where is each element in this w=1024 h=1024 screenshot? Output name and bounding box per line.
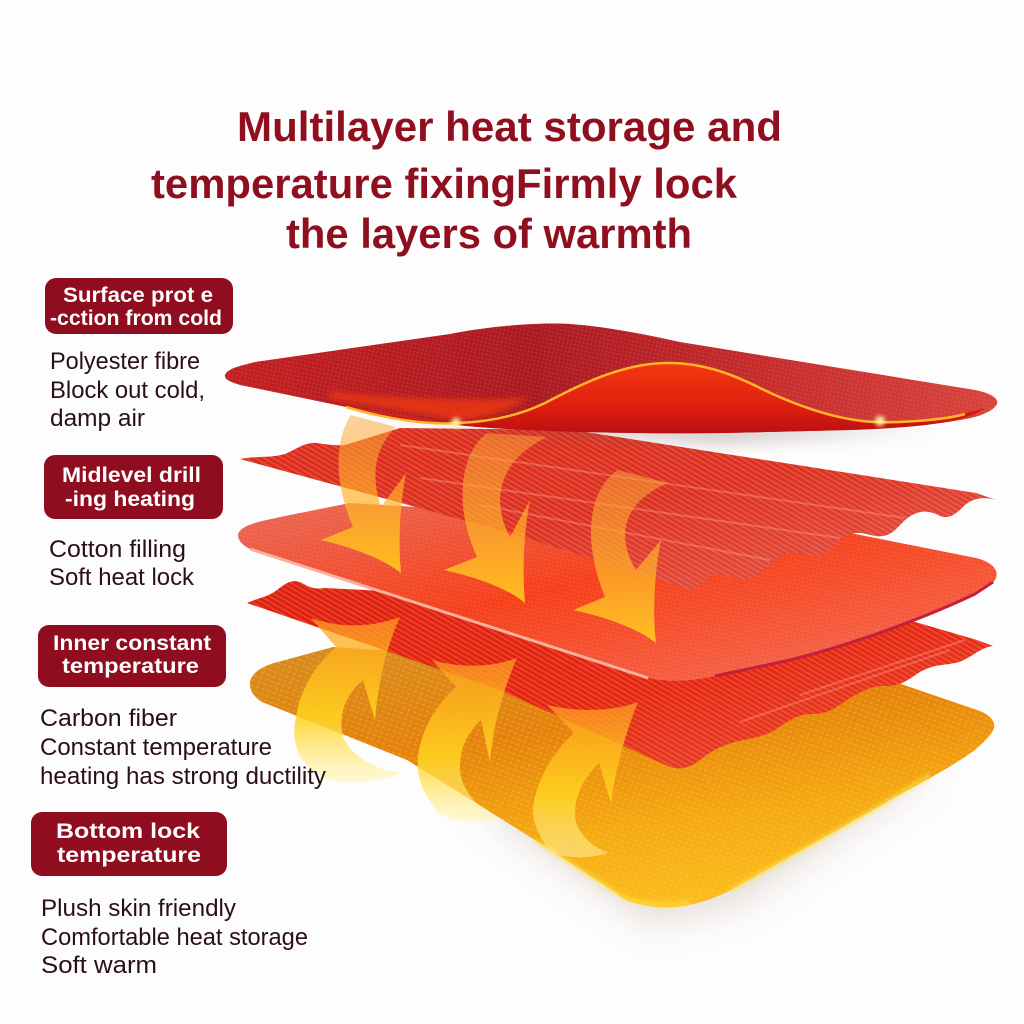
badge: -ing heating — [65, 488, 195, 511]
badge: Midlevel drill — [62, 464, 201, 487]
badge: -cction from cold — [50, 307, 222, 330]
badge: Surface prot e — [63, 284, 213, 307]
badge: Inner constant — [53, 632, 211, 655]
arrows: heat flowing down — [321, 415, 668, 643]
badge: temperature — [62, 655, 199, 678]
lifted lip — [346, 363, 985, 433]
badge — [45, 278, 233, 334]
badge — [38, 625, 226, 687]
layer: pink-red middle sheet — [238, 503, 997, 681]
bottom layer: plush yellow pad — [250, 647, 994, 925]
description: Soft warm — [41, 952, 157, 979]
title: the layers of warmth — [286, 210, 692, 257]
panel: layer stack illustration — [225, 323, 997, 925]
description: Carbon fiber — [40, 705, 177, 732]
description: Comfortable heat storage — [41, 924, 308, 951]
description — [49, 536, 195, 591]
label: surface protection from cold — [45, 278, 233, 432]
layer: lower corrugated mesh — [247, 581, 993, 768]
description: Plush skin friendly — [41, 895, 236, 922]
description: Cotton filling — [49, 536, 186, 563]
glowing lip edge — [346, 363, 965, 423]
description: Soft heat lock — [49, 564, 195, 591]
layer: upper corrugated mesh — [240, 428, 996, 589]
description: Constant temperature — [40, 734, 272, 761]
label: midlevel drilling heating — [44, 455, 223, 591]
description — [40, 705, 326, 790]
arrows: heat rising up — [294, 617, 638, 857]
description: Polyester fibre — [50, 348, 200, 375]
title: Multilayer heat storage and — [237, 103, 782, 150]
description: Block out cold, — [50, 377, 205, 404]
badge — [44, 455, 223, 519]
badge — [31, 812, 227, 876]
description: heating has strong ductility — [40, 763, 326, 790]
title: temperature fixingFirmly lock — [151, 160, 738, 207]
description — [50, 348, 205, 432]
badge: Bottom lock — [56, 820, 200, 843]
description: damp air — [50, 405, 145, 432]
label: inner constant temperature — [38, 625, 326, 790]
title — [151, 103, 782, 257]
top layer: polyester surface — [225, 323, 997, 445]
badge: temperature — [57, 844, 201, 867]
description — [41, 895, 308, 979]
label: bottom lock temperature — [31, 812, 308, 979]
